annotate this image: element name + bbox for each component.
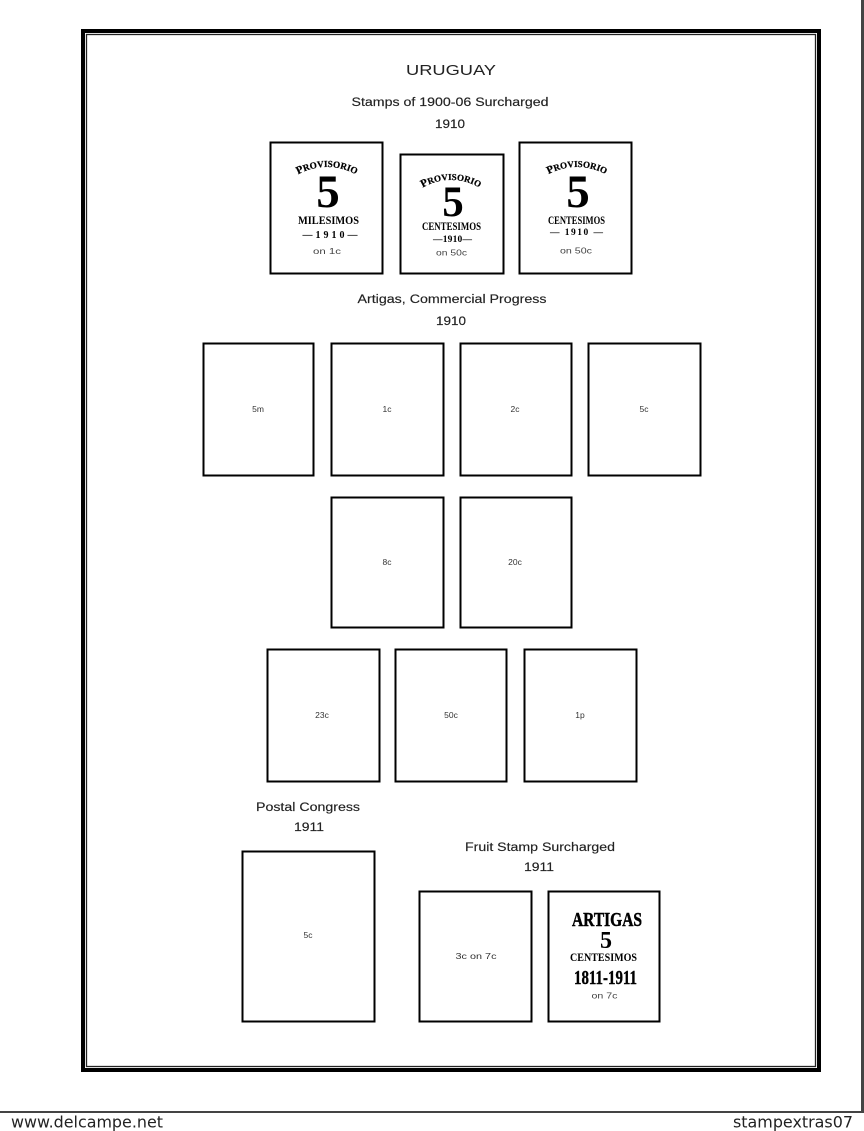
stamp: 1c [332,344,444,476]
stamp: 5c: 5c [640,404,649,414]
stamp: 8c: 8c [383,557,392,567]
stamp: 3c on 7c: 3c on 7c [456,951,497,961]
heading: postal congress: 1911 [294,822,324,834]
stamp: postal congress 5c: 5c [304,930,313,940]
stamp: 5 centesimos on 50c: CENTESIMOS [422,221,481,233]
stamp: 8c [332,498,444,628]
heading: surcharged stamps: Stamps of 1900-06 Surcharged [352,97,548,109]
stamp: 5 centesimos on 50c: PROVISORIO [419,174,481,188]
stamp: 1p: 1p [575,710,585,720]
stamp: 2c [460,344,572,476]
stamp: 23c: 23c [315,710,330,720]
heading: postal congress [256,802,360,834]
page frame [83,31,819,1070]
stamp: artigas 5 centesimos on 7c: 1811-1911 [574,967,637,989]
stamp: 5 centesimos on 50c, second: 5 [566,166,590,218]
stamp: artigas 5 centesimos on 7c: on 7c [592,990,618,1000]
stamp: 1p [524,650,636,782]
stamp: 5 centesimos on 50c: on 50c [436,248,468,258]
heading: surcharged stamps [352,97,548,131]
stamp: 5 milesimos on 1c: MILESIMOS [298,213,359,227]
stamp: 5 centesimos on 50c [400,154,504,274]
stamp: 5 centesimos on 50c, second: on 50c [560,246,593,256]
stamp: 5m: 5m [252,404,264,414]
footer rule [0,1111,864,1113]
right edge bar [861,0,864,1111]
stamp: artigas 5 centesimos on 7c: ARTIGAS [572,909,642,931]
heading: fruit stamp surcharged [465,842,615,874]
stamp: 5 milesimos on 1c [270,142,384,274]
heading: fruit stamp surcharged: Fruit Stamp Surcharged [465,842,615,854]
stamp: 5 centesimos on 50c: —1910— [432,235,472,245]
stamp: 5 centesimos on 50c, second [518,142,632,274]
stamp: postal congress 5c [242,852,374,1022]
stamp: 5m [204,344,314,476]
stamp: artigas 5 centesimos on 7c [548,892,660,1022]
stamp: 5c [588,344,700,476]
title: URUGUAY [406,62,496,79]
stamp: 3c on 7c [420,892,532,1022]
stamp: 5 centesimos on 50c: 5 [442,179,464,226]
heading: artigas, commercial progress: Artigas, Commercial Progress [358,294,547,306]
stamp: 5 milesimos on 1c: 5 [316,166,340,218]
stamp: 50c [396,650,506,782]
stamp: 20c: 20c [508,557,523,567]
footer left text: www.delcampe.net [11,1112,163,1131]
stamp: artigas 5 centesimos on 7c: CENTESIMOS [570,952,637,964]
heading: artigas, commercial progress: 1910 [436,316,466,328]
stamp: 20c [460,498,572,628]
heading: artigas, commercial progress [358,294,547,328]
footer right text: stampextras07 [733,1112,853,1131]
heading: fruit stamp surcharged: 1911 [524,862,554,874]
heading: postal congress: Postal Congress [256,802,360,814]
heading: surcharged stamps: 1910 [435,119,465,131]
stamp: 23c [268,650,380,782]
stamp: 50c: 50c [444,710,459,720]
stamp: 1c: 1c [383,404,392,414]
stamp: 5 milesimos on 1c: PROVISORIO [294,160,358,174]
stamp: 5 centesimos on 50c, second: CENTESIMOS [548,215,605,227]
stamp: 5 milesimos on 1c: on 1c [313,246,342,256]
stamp: 2c: 2c [511,404,520,414]
stamp: 5 centesimos on 50c, second: PROVISORIO [546,160,607,174]
stamp: artigas 5 centesimos on 7c: 5 [600,928,612,954]
stamp: 5 centesimos on 50c, second: — 1910 — [549,228,604,238]
stamp: 5 milesimos on 1c: —1910— [302,230,358,241]
